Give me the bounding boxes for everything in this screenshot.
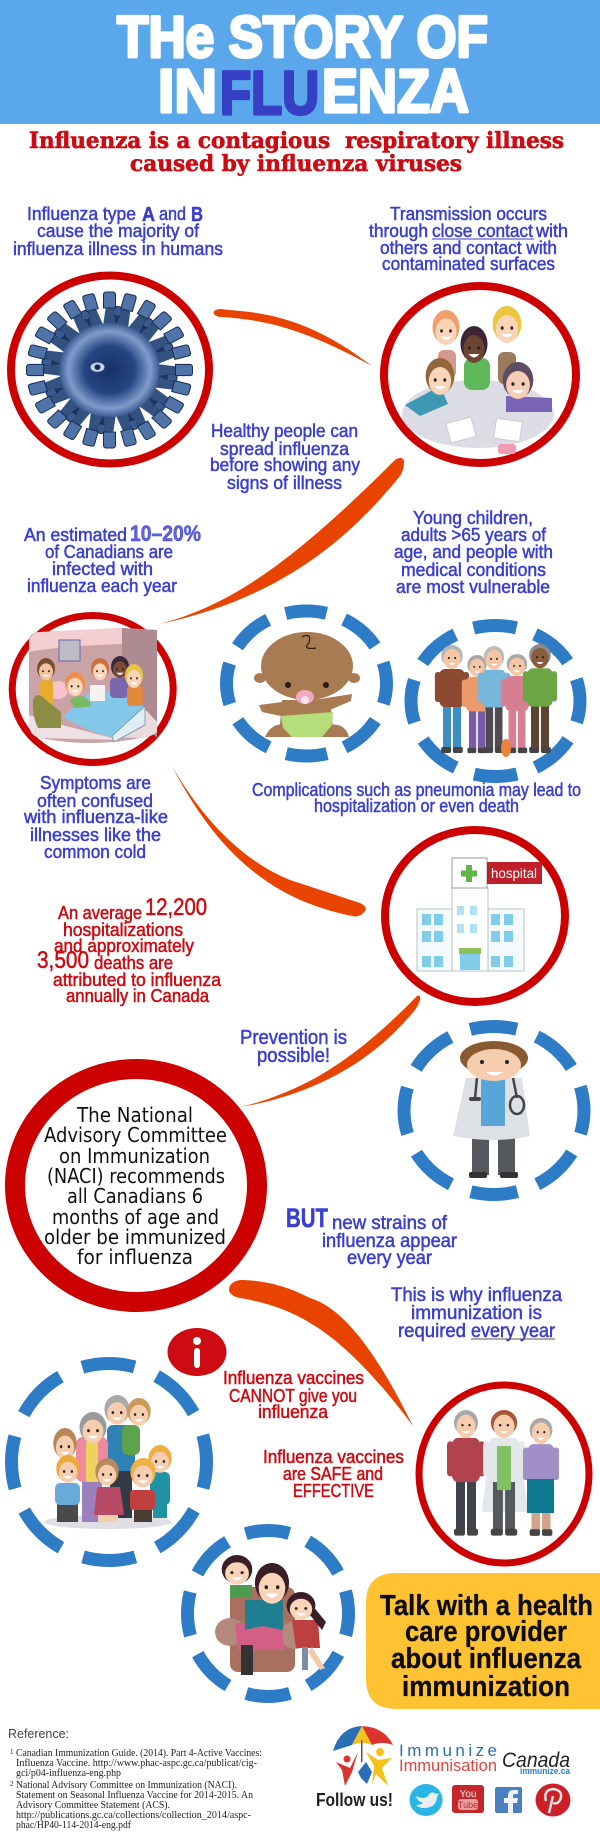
illustration: doctor with stethoscope	[453, 1041, 530, 1178]
text: 10-20 percent infected: of Canadians are	[45, 542, 173, 562]
text: new strains: new strains of	[332, 1213, 448, 1234]
text: follow us: Follow us!	[316, 1790, 393, 1810]
text: most vulnerable: adults >65 years of	[401, 525, 547, 545]
text: most vulnerable: medical conditions	[401, 560, 546, 580]
panel: virus in red ring	[11, 276, 209, 464]
text: required every year	[391, 1285, 562, 1342]
text: vaccines safe and effective: EFFECTIVE	[293, 1481, 374, 1501]
text: influenza types: cause the majority of	[37, 221, 200, 241]
text: healthy people spread: signs of illness	[227, 473, 342, 493]
text: vaccines cannot give influenza: influenza	[258, 1402, 329, 1422]
title line one: THe STORY OF	[117, 5, 488, 70]
references: Statement on Seasonal Influenza Vaccine for 2014-2015. An	[16, 1790, 254, 1801]
logo: Immunize Canada: Immunisation	[399, 1756, 497, 1775]
title line two: ENZA	[322, 57, 469, 125]
text: NACI recommendation: (NACI) recommends	[47, 1164, 225, 1188]
text: healthy people spread	[210, 421, 360, 493]
text: NACI recommendation: Advisory Committee	[44, 1123, 227, 1147]
text: NACI recommendation: on Immunization	[59, 1144, 210, 1168]
arrow: NACI to health team	[229, 1280, 413, 1426]
arrow: children to hospital room	[160, 458, 404, 624]
text: required every year: immunization is	[411, 1303, 542, 1324]
icon: Facebook	[495, 1787, 522, 1813]
callout text: about influenza	[391, 1643, 582, 1675]
text: symptoms confused	[23, 773, 168, 862]
text: hospitalizations and deaths: hospitalizations	[63, 920, 183, 940]
text: transmission: contaminated surfaces	[382, 254, 555, 274]
references: Advisory Committee Statement (ACS).	[16, 1800, 170, 1811]
text: hospitalizations and deaths	[37, 894, 222, 1006]
text: 10-20 percent infected: influenza each year	[27, 576, 177, 596]
text: vaccines safe and effective: are SAFE and	[283, 1464, 383, 1484]
text: NACI recommendation: The National	[76, 1103, 193, 1127]
text: new strains	[286, 1203, 458, 1269]
arrow: virus to children	[214, 309, 372, 366]
text: most vulnerable: are most vulnerable	[396, 577, 550, 597]
text: most vulnerable	[394, 508, 553, 597]
icon ring: older adults	[411, 626, 580, 776]
references	[8, 1726, 262, 1831]
text: transmission	[369, 204, 568, 274]
references: phac/HP40-114-2014-eng.pdf	[16, 1820, 131, 1831]
icon ring: doctor	[404, 1026, 584, 1194]
illustration: extended family	[44, 1395, 172, 1529]
text: transmission: others and contact with	[380, 238, 557, 258]
text: vaccines cannot give influenza: CANNOT give you	[229, 1386, 357, 1406]
logo: Immunize Canada: Canada	[502, 1749, 570, 1772]
icon: YouTube: You	[460, 1789, 476, 1800]
text: vaccines safe and effective	[263, 1447, 404, 1501]
text: 10-20 percent infected: infected with	[52, 559, 153, 579]
icon: Twitter	[410, 1784, 442, 1816]
text: required every year: required	[398, 1321, 466, 1342]
text: hospitalizations and deaths: 3,500	[37, 947, 89, 974]
icon: information badge	[168, 1328, 226, 1376]
illustration: pregnant mother with children in armchair	[215, 1555, 326, 1675]
illustration: baby with pacifier	[254, 632, 360, 737]
text: 10-20 percent infected: 10–20%	[130, 521, 201, 546]
icon ring: family	[12, 1364, 206, 1560]
text: healthy people spread: spread influenza	[220, 439, 350, 459]
text: transmission: close contact	[432, 221, 533, 241]
illustration: five seniors	[435, 644, 557, 757]
text: vaccines safe and effective: Influenza vaccines	[263, 1447, 404, 1467]
text: symptoms confused: often confused	[37, 791, 153, 811]
icon: hospital building	[417, 858, 542, 971]
references: National Advisory Committee on Immunization (NACI).	[16, 1780, 237, 1791]
text: NACI recommendation: for influenza	[77, 1245, 193, 1269]
references: 1	[10, 1748, 14, 1756]
text: symptoms confused: illnesses like the	[30, 825, 161, 845]
text: prevention is possible: Prevention is	[240, 1027, 347, 1049]
text: required every year: This is why influenza	[391, 1285, 562, 1306]
text: symptoms confused: Symptoms are	[40, 773, 151, 793]
subtitle: Influenza is a contagious respiratory illness	[29, 128, 564, 154]
logo: Immunize Canada: Immunize	[399, 1741, 497, 1760]
text: NACI recommendation: older be immunized	[44, 1225, 226, 1249]
text: complications: hospitalization or even death	[314, 796, 519, 816]
illustration: senior man, doctor and senior woman	[447, 1410, 559, 1536]
panel: NACI recommendation in red ring	[15, 1069, 257, 1302]
title line two	[158, 57, 469, 127]
text: hospitalizations and deaths: and approximately	[54, 936, 194, 956]
illustration: children drawing together	[402, 306, 554, 454]
text: NACI recommendation	[44, 1103, 227, 1269]
text: hospitalizations and deaths: attributed to influenza	[53, 970, 222, 990]
illustration: child in hospital bed	[29, 628, 157, 743]
icon: hospital building: hospital	[491, 865, 537, 881]
text: NACI recommendation: months of age and	[52, 1205, 219, 1229]
text: most vulnerable: age, and people with	[394, 542, 553, 562]
text: most vulnerable: Young children,	[413, 508, 533, 528]
subtitle: caused by influenza viruses	[130, 151, 462, 177]
text: required every year: every year	[471, 1321, 556, 1342]
text: hospitalizations and deaths: annually in Canada	[66, 986, 210, 1006]
icon ring: baby	[226, 611, 386, 756]
text: prevention is possible	[240, 1027, 347, 1067]
arrow: hospital to NACI	[241, 996, 420, 1107]
text: 10-20 percent infected: An estimated	[24, 525, 127, 545]
logo: Immunize Canada: immunize.ca	[520, 1766, 571, 1776]
text: hospitalizations and deaths: 12,200	[145, 894, 207, 921]
references: Influenza Vaccine. http://www.phac-aspc.gc.ca/publicat/cig-	[16, 1758, 257, 1769]
references: gci/p04-influenza-eng.php	[16, 1768, 121, 1779]
icon: YouTube: Tube	[458, 1800, 478, 1810]
text: symptoms confused: with influenza-like	[23, 807, 168, 827]
text: vaccines cannot give influenza	[223, 1368, 364, 1422]
text: new strains: influenza appear	[322, 1231, 458, 1252]
title line two: FLU	[220, 59, 319, 127]
icon: YouTube	[452, 1785, 484, 1813]
panel: children in red ring	[384, 286, 576, 463]
callout text: immunization	[402, 1671, 570, 1703]
text: influenza types	[13, 204, 223, 259]
header banner	[0, 0, 600, 127]
callout text	[380, 1590, 593, 1703]
callout: talk with a health care provider	[366, 1573, 600, 1709]
text: influenza types: A	[142, 204, 155, 226]
references: 2	[10, 1780, 14, 1788]
icon: umbrella and figures	[333, 1726, 393, 1786]
panel: hospital room in red ring	[12, 616, 173, 762]
text: prevention is possible: possible!	[257, 1045, 330, 1067]
text: transmission: with	[535, 221, 568, 241]
text: hospitalizations and deaths: deaths are	[94, 953, 173, 973]
references: Canadian Immunization Guide. (2014). Part 4-Active Vaccines:	[16, 1748, 262, 1759]
text: new strains: BUT	[286, 1203, 328, 1233]
text: healthy people spread: before showing any	[210, 455, 360, 475]
text: complications	[252, 780, 581, 816]
text: NACI recommendation: all Canadians 6	[67, 1184, 203, 1208]
text: symptoms confused: common cold	[44, 842, 146, 862]
logo: Immunize Canada	[333, 1726, 571, 1786]
text: vaccines cannot give influenza: Influenza vaccines	[223, 1368, 364, 1388]
text: transmission: through	[369, 221, 428, 241]
text: influenza types: influenza illness in humans	[13, 239, 223, 259]
text: hospitalizations and deaths: An average	[58, 903, 142, 923]
icon ring: mother and children	[188, 1530, 348, 1696]
icon: virus particle	[26, 292, 193, 448]
text: 10-20 percent infected	[24, 521, 201, 596]
text: influenza types: and	[159, 204, 186, 224]
references: Reference:	[8, 1726, 69, 1741]
callout text: care provider	[405, 1616, 567, 1648]
title line two: IN	[158, 57, 217, 125]
text: healthy people spread: Healthy people can	[211, 421, 358, 441]
text: transmission: Transmission occurs	[390, 204, 547, 224]
panel: health team in red ring	[419, 1385, 589, 1563]
panel: hospital in red ring	[385, 830, 565, 1002]
text: influenza types: Influenza type	[27, 204, 136, 224]
text: new strains: every year	[347, 1248, 433, 1269]
references: http://publications.gc.ca/collections/collection_2014/aspc-	[16, 1810, 251, 1821]
arrow: room to hospital	[172, 766, 366, 916]
subtitle	[29, 128, 564, 177]
icon: Pinterest	[536, 1784, 570, 1816]
text: influenza types: B	[191, 204, 203, 226]
